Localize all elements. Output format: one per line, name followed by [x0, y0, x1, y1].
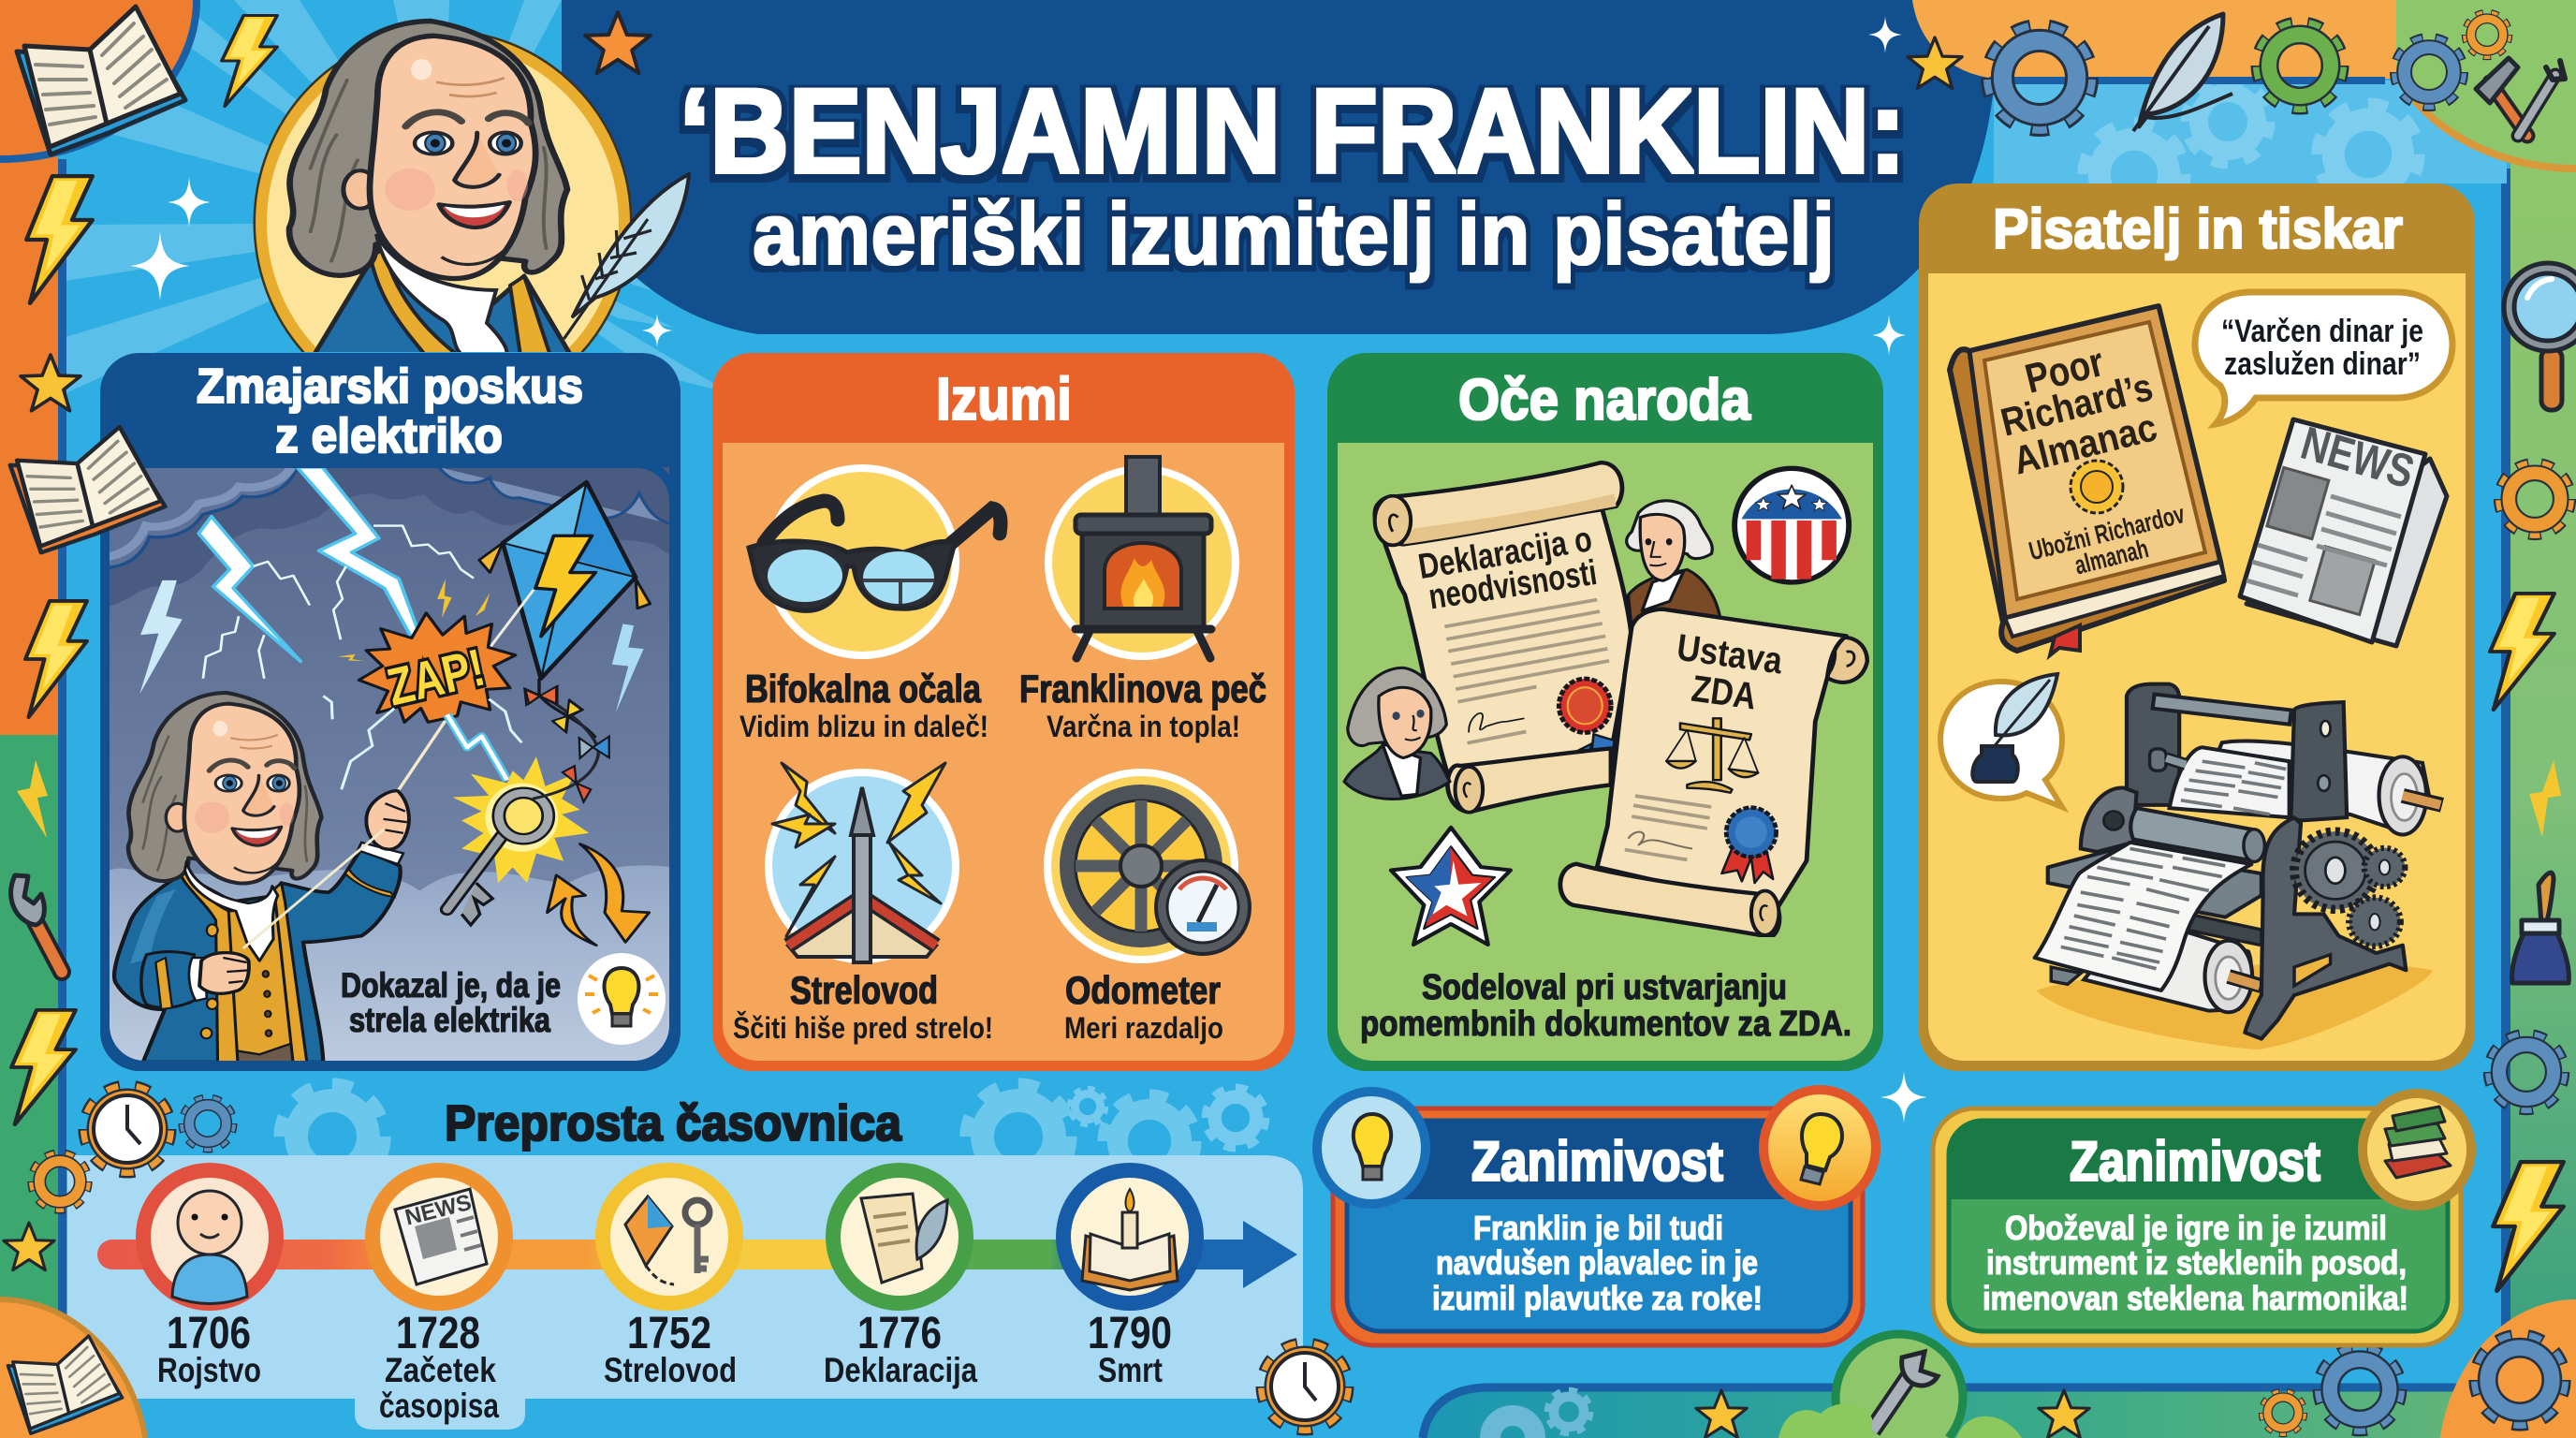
decorative gears: [1990, 13, 2569, 1433]
figure: man in brown coat: [1627, 501, 1720, 630]
Franklin, key and arrows: [103, 686, 674, 1067]
icon: bulb badge right: [1764, 1090, 1876, 1206]
invention: Franklin stove: [1019, 457, 1266, 743]
event: 1728 magazine: časopisa: [379, 1387, 499, 1425]
text: swimming fact: Franklin je bil tudi: [1473, 1209, 1723, 1247]
invention: bifocals: Vidim blizu in daleč!: [739, 710, 988, 743]
icon: clock gear bottom: [1264, 1345, 1346, 1428]
invention: bifocals: [739, 468, 1001, 743]
decorative book bottom left: [7, 1336, 123, 1433]
icon: feather top: [2133, 14, 2232, 131]
timeline heading gears: [283, 1087, 1265, 1186]
invention: odometer: Odometer: [1065, 968, 1221, 1012]
icon: clock gear left: [86, 1088, 168, 1170]
scroll label: declaration: [1415, 520, 1600, 617]
icon: scales: [1666, 718, 1758, 793]
right cuff and hand: [358, 843, 403, 864]
title: ‘BENJAMIN FRANKLIN:: [680, 65, 1906, 198]
orange arrows: [548, 844, 650, 946]
top right orange tab: [1912, 0, 2396, 81]
icon: bulb badge left: [1317, 1092, 1426, 1204]
clouds on bottom band: [1778, 1403, 2022, 1438]
right edge strip: [2501, 159, 2576, 1386]
top right light tab: [1994, 81, 2507, 183]
corner: top right: [2379, 0, 2576, 169]
timeline arrow: [97, 1221, 1297, 1288]
timeline: [67, 1095, 1303, 1430]
storm scene: [103, 463, 679, 1067]
event: 1752 lightning rod: [603, 1170, 737, 1389]
book: Poor Richard's Almanac: [1950, 306, 2224, 655]
text: glass harmonica fact: imenovan steklena harmonika!: [1983, 1279, 2408, 1317]
ink bubble: [1940, 674, 2062, 807]
invention: Franklin stove: Franklinova peč: [1019, 667, 1266, 711]
icon: stack of books badge: [2363, 1093, 2471, 1206]
panel: fun fact glass harmonica: [1933, 1093, 2471, 1345]
speech bubble: quote: zaslužen dinar”: [2224, 346, 2421, 382]
invention: lightning rod: [733, 763, 993, 1045]
text: swimming fact: izumil plavutke za roke!: [1432, 1279, 1763, 1317]
text: glass harmonica fact: instrument iz steklenih posod,: [1986, 1243, 2407, 1282]
tail bows upper: [524, 686, 583, 732]
text: documents: [1360, 968, 1852, 1044]
text: documents: Sodeloval pri ustvarjanju: [1422, 968, 1787, 1007]
invention: lightning rod: Strelovod: [790, 968, 938, 1012]
scroll: constitution: [1560, 609, 1867, 935]
star badge: [1391, 828, 1511, 945]
icon: bulb: [578, 953, 666, 1045]
event: 1752 lightning rod: 1752: [627, 1309, 711, 1358]
newspaper: [2240, 417, 2447, 646]
text: glass harmonica fact: [1983, 1209, 2408, 1317]
heading: fun fact: Zanimivost: [2070, 1130, 2320, 1193]
panel: writer and printer: [1919, 183, 2475, 1071]
icon: magnifying glass: [2504, 263, 2576, 410]
book: Poor Richard's Almanac: Almanac: [2009, 404, 2161, 483]
left hand: [199, 953, 249, 993]
coat: [114, 848, 401, 1063]
event: 1706 birth: [143, 1170, 276, 1389]
tail bows lower: [533, 697, 598, 799]
event: 1706 birth: 1706: [167, 1309, 251, 1358]
invention: odometer: Meri razdaljo: [1064, 1011, 1223, 1045]
sky, clouds, lightning and kite: [108, 463, 679, 738]
invention: Franklin stove: Varčna in topla!: [1046, 710, 1240, 743]
invention: odometer: [1047, 772, 1250, 1045]
buttons: [201, 924, 271, 1038]
text: documents: pomembnih dokumentov za ZDA.: [1360, 1005, 1852, 1044]
event: 1776 declaration: 1776: [857, 1309, 942, 1358]
flag badge: [1734, 468, 1849, 582]
book: Poor Richard's Almanac: Ubožni Richardov: [2026, 499, 2188, 565]
heading: timeline: Preprosta časovnica: [445, 1095, 902, 1152]
panel: inventions: [712, 353, 1295, 1071]
title: ameriški izumitelj in pisatelj: [753, 184, 1835, 283]
decorative gears near timeline: [33, 1099, 232, 1209]
scroll label: constitution: ZDA: [1690, 668, 1759, 718]
icon: wrench left: [11, 875, 62, 972]
heading: writer and printer: Pisatelj in tiskar: [1993, 198, 2403, 260]
timeline background: [67, 1155, 1303, 1430]
newspaper: NEWS: [2295, 417, 2420, 498]
caption: lightning is electricity: strela elektrika: [349, 1001, 550, 1039]
icon: quill beside portrait: [564, 174, 689, 339]
decorative star near timeline: [4, 1223, 54, 1270]
heading: fun fact: Zanimivost: [1471, 1130, 1723, 1193]
text: swimming fact: navdušen plavalec in je: [1436, 1243, 1758, 1282]
event: 1728 magazine: 1728: [396, 1309, 480, 1358]
heading: kite experiment: z elektriko: [275, 409, 503, 463]
faint gears on bottom band: [1490, 1391, 1589, 1438]
bottom band: [1421, 1386, 2576, 1438]
title banner: [562, 0, 1998, 334]
portrait of Benjamin Franklin: [253, 19, 633, 352]
vest: [230, 910, 290, 1054]
event: 1728 magazine: NEWS: [402, 1190, 474, 1231]
icon: wrench badge at bottom: [1836, 1334, 1963, 1438]
scroll label: constitution: Ustava: [1675, 627, 1785, 682]
text: glass harmonica fact: Oboževal je igre in je izumil: [2005, 1209, 2387, 1247]
corner: bottom right: [2440, 1299, 2576, 1438]
ZAP text: ZAP!: [382, 638, 490, 716]
event: 1790 death: Smrt: [1098, 1351, 1163, 1389]
panel: kite experiment: [100, 353, 681, 1071]
book: Poor Richard's Almanac: Richard’s: [1997, 364, 2157, 445]
scroll: declaration of independence: [1375, 462, 1632, 813]
decorative book top left: [17, 7, 185, 154]
event: 1790 death: 1790: [1088, 1309, 1172, 1358]
heading: founding father: Oče naroda: [1458, 368, 1750, 433]
sparkles: [130, 16, 1927, 1123]
event: 1728 magazine: [373, 1170, 505, 1425]
caption: lightning is electricity: [341, 966, 561, 1039]
speech bubble: quote: [2195, 292, 2452, 424]
event: 1776 declaration: [824, 1170, 977, 1389]
printing press: [2035, 684, 2442, 1049]
book: Poor Richard's Almanac: almanah: [2071, 534, 2151, 580]
decorative stars: [21, 12, 2089, 1438]
event: 1776 declaration: Deklaracija: [824, 1351, 977, 1389]
corner: bottom left: [0, 1299, 145, 1438]
left sleeve: [141, 952, 196, 1008]
icon: hammer and wrench: [2476, 58, 2565, 136]
cravat: [185, 861, 278, 961]
lower lightning: [323, 696, 521, 789]
background light rays: [66, 0, 713, 393]
invention: lightning rod: Ščiti hiše pred strelo!: [733, 1011, 993, 1045]
book: Poor Richard's Almanac: Poor: [2021, 339, 2108, 403]
decorative book over first panel: [10, 427, 165, 552]
event: 1706 birth: Rojstvo: [157, 1351, 261, 1389]
documents and figures: [1344, 462, 1867, 945]
figure: Franklin miniature: [1344, 668, 1450, 799]
caption: lightning is electricity: Dokazal je, da je: [341, 966, 561, 1005]
text: swimming fact: [1432, 1209, 1763, 1317]
scroll label: constitution: [1675, 627, 1785, 718]
corner: top left: [0, 0, 197, 159]
icon: ink bottle right: [2512, 873, 2569, 983]
kite: [479, 482, 651, 679]
scroll label: declaration: Deklaracija o: [1415, 520, 1595, 587]
heading: inventions: Izumi: [936, 365, 1072, 433]
hand string: [243, 830, 384, 948]
key burst: [452, 756, 589, 883]
speech bubble: quote: “Varčen dinar je: [2221, 314, 2423, 349]
left edge strip: [0, 0, 66, 1320]
title: [680, 65, 1906, 283]
heading: kite experiment: Zmajarski poskus: [197, 360, 583, 414]
scroll label: declaration: neodvisnosti: [1427, 553, 1600, 617]
heading: kite experiment: [197, 360, 583, 463]
panel: founding father: [1327, 353, 1883, 1071]
faint gears top right: [2086, 81, 2417, 223]
zap burst: [359, 613, 516, 722]
event: 1752 lightning rod: Strelovod: [604, 1351, 737, 1389]
event: 1728 magazine: Začetek: [385, 1351, 496, 1389]
icon: sun: [2071, 461, 2123, 513]
event: 1790 death: [1063, 1170, 1196, 1389]
panel: fun fact swimming: [1317, 1090, 1876, 1345]
invention: bifocals: Bifokalna očala: [745, 667, 982, 711]
